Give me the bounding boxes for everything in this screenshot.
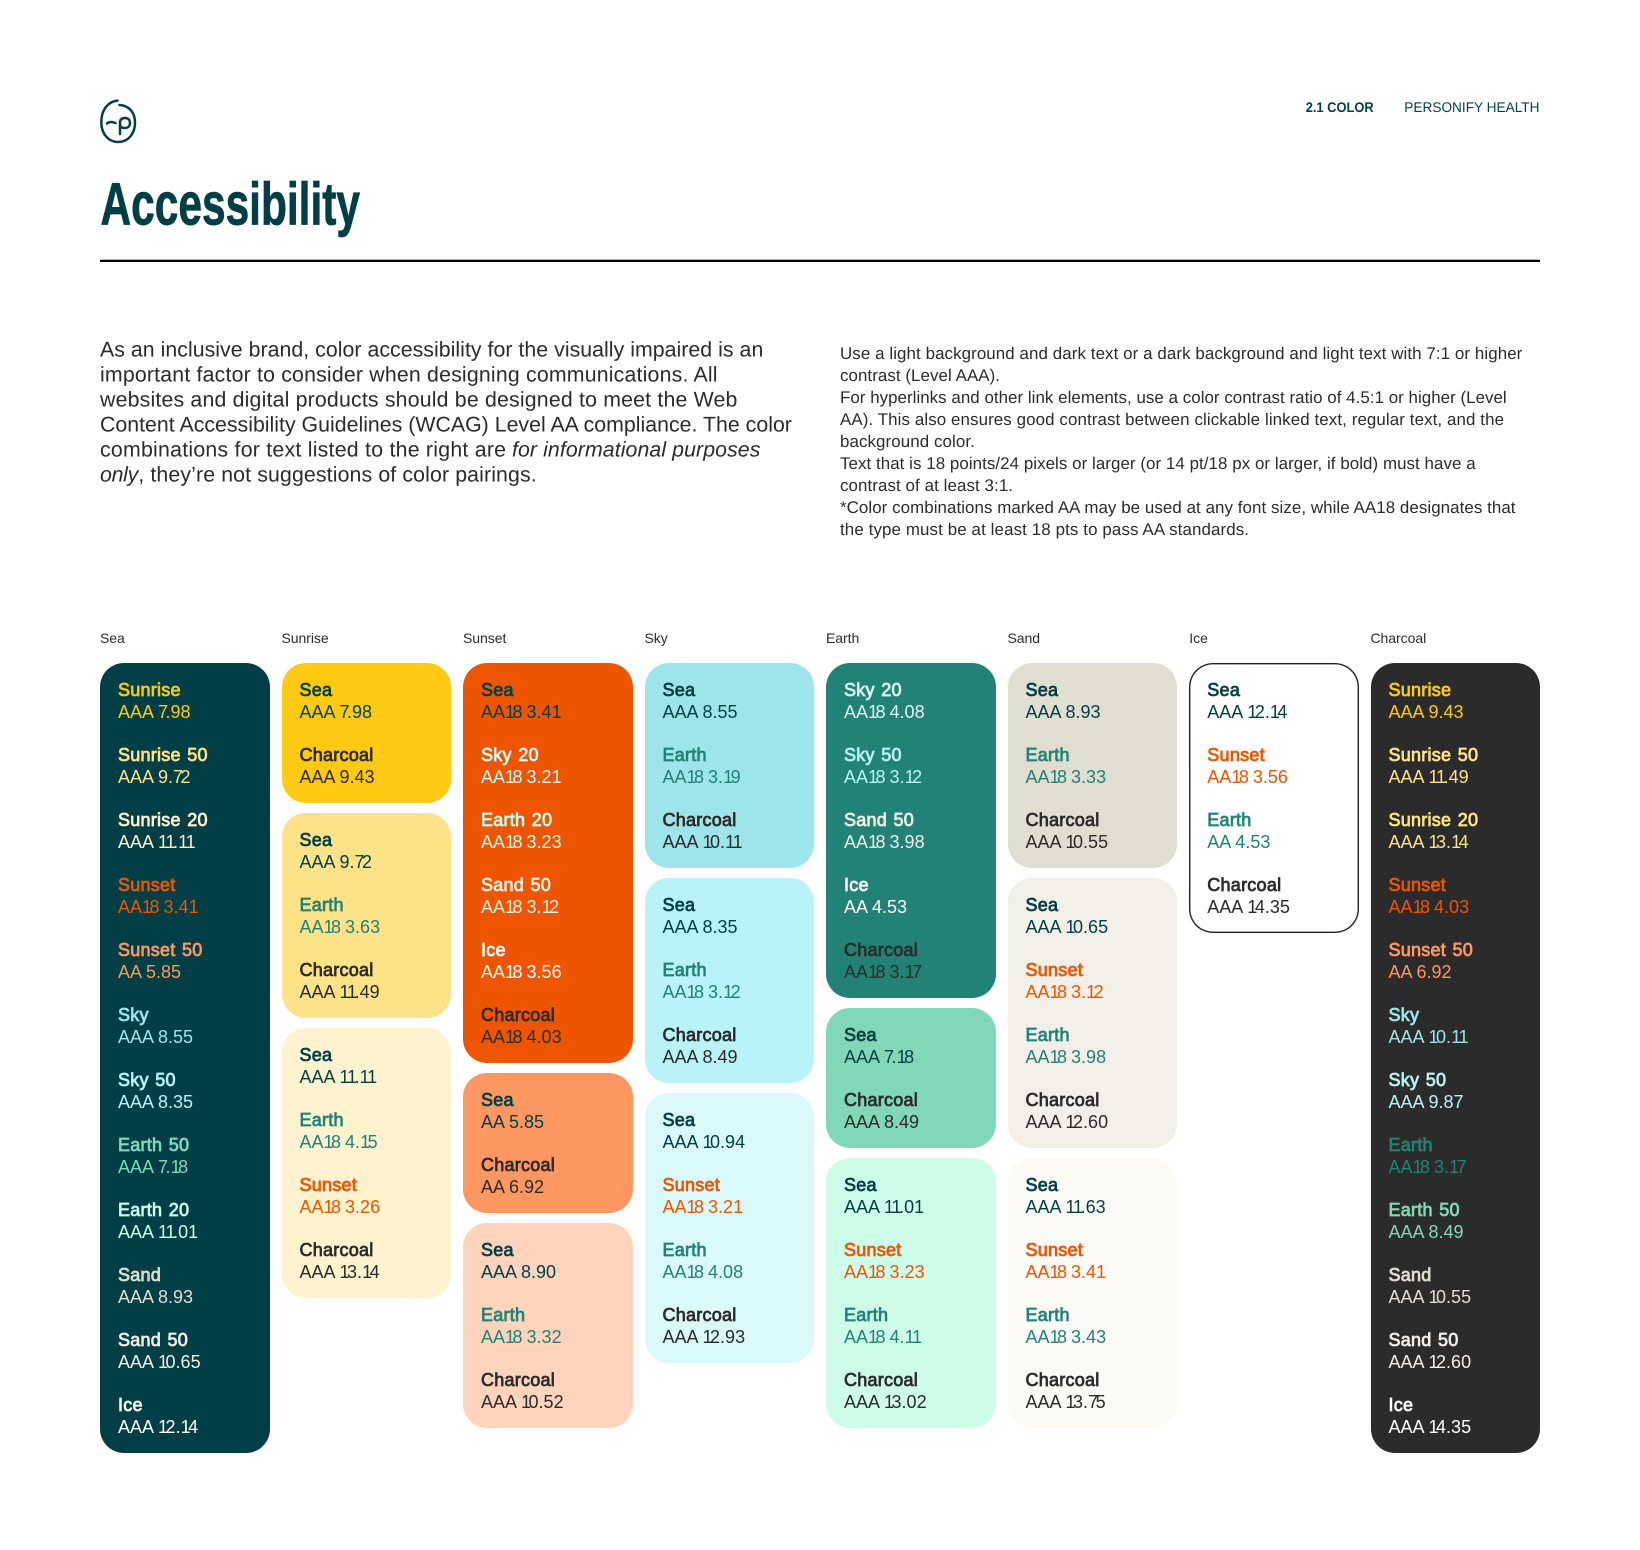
pair: Earth 20: Earth 20 xyxy=(118,1200,189,1220)
column label: Earth: Earth xyxy=(826,630,859,646)
pair: Sky 50: AA18 3.12 xyxy=(844,767,922,787)
pair: Sky 20 xyxy=(844,679,978,723)
pair: Earth xyxy=(844,1304,978,1348)
pair: Charcoal xyxy=(844,1089,978,1133)
pair: Sea xyxy=(662,1109,796,1153)
pair: Sunrise: Sunrise xyxy=(118,680,181,700)
pair: Sea: AAA 9.72 xyxy=(300,852,372,872)
pair: Sea xyxy=(844,1174,978,1218)
pair: Sand 50 xyxy=(1388,1329,1522,1373)
pair: Earth: AA18 4.08 xyxy=(662,1262,743,1282)
card: Sky 50 background xyxy=(644,878,814,1083)
pair: Earth: AA18 3.33 xyxy=(1026,767,1106,787)
pair: Sand: Sand xyxy=(118,1265,161,1285)
pair: Sea: Sea xyxy=(1207,680,1240,700)
pair: Sea xyxy=(662,680,738,722)
pair: Earth 20 xyxy=(118,1200,198,1242)
pair: Sunrise 20 xyxy=(1388,809,1522,853)
pair: Earth xyxy=(1026,1304,1159,1348)
pair: Sea xyxy=(481,1240,556,1282)
pair: Sunset: Sunset xyxy=(1026,1240,1083,1260)
pair: Sky 20: AA18 4.08 xyxy=(844,702,925,722)
pair: Sand 50: Sand 50 xyxy=(118,1330,188,1350)
pair: Ice xyxy=(1388,1394,1522,1438)
pair: Charcoal: Charcoal xyxy=(1026,1370,1100,1390)
pair: Earth: Earth xyxy=(300,1110,344,1130)
pair: Earth: AA 4.53 xyxy=(1207,832,1270,852)
pair: Charcoal: AA18 4.03 xyxy=(481,1027,562,1047)
column: Sky xyxy=(644,630,814,1363)
pair: Sand 50 xyxy=(118,1330,201,1372)
pair: Sky xyxy=(118,1005,193,1047)
intro paragraph xyxy=(99,338,792,487)
column label: Ice: Ice xyxy=(1189,630,1208,646)
pair: Charcoal: Charcoal xyxy=(1207,875,1281,895)
pair: Sunrise: AAA 7.98 xyxy=(118,702,191,722)
pair: Charcoal: AA18 3.17 xyxy=(844,962,920,982)
pair: Earth xyxy=(662,1239,796,1283)
pair: Sand 50 xyxy=(844,809,978,853)
intro paragraph: only xyxy=(100,463,140,487)
column label: Charcoal: Charcoal xyxy=(1370,630,1426,646)
section label: 2.1 COLOR xyxy=(1306,99,1374,115)
pair: Sand: AAA 10.55 xyxy=(1388,1287,1471,1307)
pair: Sand 50: Sand 50 xyxy=(481,875,551,895)
pair: Charcoal: AAA 11.49 xyxy=(300,982,380,1002)
pair: Charcoal: AAA 14.35 xyxy=(1207,897,1290,917)
pair: Sunset: AA18 3.41 xyxy=(118,897,196,917)
card: Sand 20 background xyxy=(1008,1158,1177,1428)
pair: Sky xyxy=(1388,1004,1522,1048)
card: Sky 20 background xyxy=(644,1093,814,1363)
guidelines paragraph: contrast (Level AAA). xyxy=(840,366,1000,385)
pair: Charcoal: Charcoal xyxy=(481,1370,555,1390)
pair: Sunrise 50: Sunrise 50 xyxy=(118,745,208,765)
pair: Earth xyxy=(1388,1134,1522,1178)
pair: Charcoal xyxy=(662,1304,796,1348)
guidelines paragraph: contrast of at least 3:1. xyxy=(840,476,1013,495)
pair: Sunset: AA18 3.21 xyxy=(662,1197,741,1217)
guidelines paragraph: *Color combinations marked AA may be used at any font size, while AA18 designates that xyxy=(840,498,1516,517)
pair: Sunset: AA18 4.03 xyxy=(1388,897,1469,917)
pair: Sky 20: Sky 20 xyxy=(844,680,902,700)
intro paragraph: Content Accessibility Guidelines (WCAG) Level AA compliance. The color xyxy=(100,413,792,437)
column label: Sand: Sand xyxy=(1008,630,1040,646)
pair: Earth 50: AAA 8.49 xyxy=(1388,1222,1464,1242)
pair: Sunrise 50: AAA 11.49 xyxy=(1388,767,1469,787)
pair: Charcoal xyxy=(300,1240,380,1282)
pair: Sky 50 xyxy=(1388,1069,1522,1113)
pair: Sky 20: Sky 20 xyxy=(481,745,539,765)
pair: Charcoal: Charcoal xyxy=(300,745,374,765)
pair: Sunset xyxy=(300,1175,380,1217)
title: Accessibility xyxy=(100,170,360,238)
pair: Sea: Sea xyxy=(662,895,695,915)
pair: Sky: AAA 10.11 xyxy=(1388,1027,1466,1047)
pair: Earth: Earth xyxy=(662,960,707,980)
pair: Earth xyxy=(662,745,741,787)
pair: Sky 50: Sky 50 xyxy=(1388,1070,1446,1090)
pair: Charcoal: AA 6.92 xyxy=(481,1177,544,1197)
pair: Sea: Sea xyxy=(844,1175,877,1195)
column: Sunrise xyxy=(282,630,451,1298)
pair: Sand xyxy=(118,1265,193,1307)
pair: Sunset xyxy=(1026,959,1159,1003)
pair: Sunset: Sunset xyxy=(844,1240,902,1260)
pair: Sea: AAA 7.18 xyxy=(844,1047,914,1067)
pair: Sea: Sea xyxy=(300,830,332,850)
card: Earth 20 background xyxy=(826,1158,996,1428)
pair: Ice: AAA 14.35 xyxy=(1388,1417,1471,1437)
pair: Sunrise 20: Sunrise 20 xyxy=(1388,810,1478,830)
pair: Sea xyxy=(662,895,738,937)
pair: Earth xyxy=(481,1305,562,1347)
pair: Charcoal: Charcoal xyxy=(844,940,918,960)
intro paragraph: for informational purposes xyxy=(512,438,761,462)
pair: Ice: Ice xyxy=(481,940,506,960)
card: Ice background xyxy=(1189,663,1359,933)
pair: Sunset: AA18 3.41 xyxy=(1026,1262,1104,1282)
guidelines paragraph: Text that is 18 points/24 pixels or larger (or 14 pt/18 px or larger, if bold) must have a xyxy=(840,454,1476,473)
column label: Sunrise: Sunrise xyxy=(282,630,329,646)
pair: Sea: Sea xyxy=(662,1110,695,1130)
pair: Charcoal: AAA 12.93 xyxy=(662,1327,745,1347)
pair: Charcoal xyxy=(1207,874,1341,918)
pair: Sunrise 20 xyxy=(118,810,208,852)
pair: Sunset xyxy=(1207,744,1341,788)
pair: Sea: Sea xyxy=(481,1240,514,1260)
intro paragraph: As an inclusive brand, color accessibility for the visually impaired is an xyxy=(100,338,763,362)
pair: Charcoal: AAA 9.43 xyxy=(300,767,375,787)
pair: Charcoal xyxy=(662,810,742,852)
pair: Sunset: Sunset xyxy=(1207,745,1265,765)
pair: Charcoal xyxy=(481,1370,564,1412)
pair: Charcoal xyxy=(1026,1089,1159,1133)
pair: Sunset 50 xyxy=(118,940,203,982)
pair: Sand: AAA 8.93 xyxy=(118,1287,193,1307)
pair: Earth xyxy=(1026,1024,1159,1068)
pair: Sea xyxy=(481,680,561,722)
pair: Earth: AA18 4.11 xyxy=(844,1327,920,1347)
pair: Charcoal: AAA 10.55 xyxy=(1026,832,1108,852)
pair: Charcoal xyxy=(1026,809,1159,853)
pair: Earth: AA18 3.43 xyxy=(1026,1327,1106,1347)
pair: Charcoal: Charcoal xyxy=(662,1305,737,1325)
pair: Ice: AA18 3.56 xyxy=(481,962,562,982)
pair: Earth 20: Earth 20 xyxy=(481,810,552,830)
column: Earth xyxy=(826,630,996,1438)
pair: Sunset: AA18 3.12 xyxy=(1026,982,1104,1002)
card: Sand background xyxy=(1008,663,1177,868)
column label: Sea: Sea xyxy=(100,630,125,646)
guidelines paragraph: Use a light background and dark text or a dark background and light text with 7:1 or higher xyxy=(840,344,1523,363)
pair: Sunrise 20: Sunrise 20 xyxy=(118,810,208,830)
pair: Ice: AA 4.53 xyxy=(844,897,907,917)
pair: Sunset xyxy=(1026,1239,1159,1283)
pair: Earth: Earth xyxy=(662,1240,707,1260)
pair: Sunrise 20: AAA 13.14 xyxy=(1388,832,1469,852)
pair: Charcoal xyxy=(481,1155,555,1197)
pair: Sea: AAA 11.01 xyxy=(844,1197,922,1217)
pair: Earth: Earth xyxy=(481,1305,525,1325)
pair: Sunset xyxy=(1388,874,1522,918)
card: Sunrise 50 background xyxy=(282,813,451,1018)
card: Sky background xyxy=(644,663,814,868)
pair: Sunset 50 xyxy=(1388,939,1522,983)
pair: Sunset: Sunset xyxy=(118,875,176,895)
pair: Earth: Earth xyxy=(1026,1305,1070,1325)
pair: Earth 50 xyxy=(118,1135,189,1177)
pair: Sea: Sea xyxy=(481,1090,514,1110)
intro paragraph: , they’re not suggestions of color pairings. xyxy=(138,463,537,487)
pair: Charcoal: Charcoal xyxy=(1026,1090,1100,1110)
pair: Earth: Earth xyxy=(1026,745,1070,765)
pair: Sky 20: AA18 3.21 xyxy=(481,767,559,787)
pair: Sunrise xyxy=(1388,679,1522,723)
section label xyxy=(1306,99,1540,115)
pair: Sunset 50: Sunset 50 xyxy=(118,940,203,960)
pair: Sea xyxy=(300,680,372,722)
card: Sunset 20 background xyxy=(463,1223,632,1428)
pair: Charcoal: AAA 10.52 xyxy=(481,1392,564,1412)
pair: Sunset xyxy=(662,1174,796,1218)
pair: Charcoal: Charcoal xyxy=(300,1240,374,1260)
guidelines paragraph: the type must be at least 18 pts to pass AA standards. xyxy=(840,520,1249,539)
pair: Charcoal: AAA 8.49 xyxy=(844,1112,919,1132)
pair: Charcoal: Charcoal xyxy=(481,1155,555,1175)
pair: Charcoal: AAA 12.60 xyxy=(1026,1112,1108,1132)
pair: Ice: Ice xyxy=(844,875,869,895)
pair: Sunset: Sunset xyxy=(1026,960,1083,980)
pair: Earth: Earth xyxy=(1388,1135,1433,1155)
pair: Sand 50: AAA 12.60 xyxy=(1388,1352,1471,1372)
pair: Charcoal: AAA 8.49 xyxy=(662,1047,738,1067)
pair: Sand xyxy=(1388,1264,1522,1308)
pair: Sea: Sea xyxy=(300,1045,332,1065)
pair: Sea xyxy=(844,1024,978,1068)
guidelines paragraph: AA). This also ensures good contrast between clickable linked text, regular text, and the xyxy=(840,410,1504,429)
pair: Sky 50: AAA 9.87 xyxy=(1388,1092,1461,1112)
pair: Charcoal: Charcoal xyxy=(1026,810,1100,830)
pair: Earth xyxy=(1026,744,1159,788)
pair: Sand 50: Sand 50 xyxy=(844,810,914,830)
pair: Sea: AAA 8.35 xyxy=(662,917,738,937)
pair: Sea xyxy=(300,1045,376,1087)
pair: Sunrise: Sunrise xyxy=(1388,680,1451,700)
pair: Sand 50: AA18 3.12 xyxy=(481,897,559,917)
pair: Earth: AA18 3.32 xyxy=(481,1327,562,1347)
pair: Charcoal: Charcoal xyxy=(662,1025,737,1045)
pair: Sea xyxy=(1026,679,1159,723)
pair: Sunset: AA18 3.26 xyxy=(300,1197,380,1217)
pair: Earth: AA18 3.12 xyxy=(662,982,741,1002)
pair: Sea: AA 5.85 xyxy=(481,1112,544,1132)
pair: Sea xyxy=(300,830,372,872)
pair: Earth xyxy=(300,895,380,937)
pair: Sea: AAA 10.94 xyxy=(662,1132,745,1152)
card: Earth 50 background xyxy=(826,1008,996,1148)
pair: Earth: Earth xyxy=(1207,810,1252,830)
pair: Sky 50: Sky 50 xyxy=(118,1070,176,1090)
pair: Sky 50: Sky 50 xyxy=(844,745,902,765)
pair: Earth: Earth xyxy=(844,1305,888,1325)
pair: Charcoal: Charcoal xyxy=(844,1370,918,1390)
pair: Earth: Earth xyxy=(1026,1025,1070,1045)
pair: Charcoal xyxy=(1026,1369,1159,1413)
column: Sunset xyxy=(463,630,633,1428)
pair: Sea: AAA 7.98 xyxy=(300,702,372,722)
card: Sunset background xyxy=(463,663,632,1063)
column: Sand xyxy=(1008,630,1177,1438)
pair: Sunrise 50 xyxy=(118,745,208,787)
pair: Sunset: AA18 3.23 xyxy=(844,1262,925,1282)
pair: Charcoal xyxy=(300,960,380,1002)
pair: Sunset 50: AA 6.92 xyxy=(1388,962,1452,982)
pair: Charcoal xyxy=(481,1005,562,1047)
pair: Sand 50: Sand 50 xyxy=(1388,1330,1459,1350)
pair: Earth: AA18 3.98 xyxy=(1026,1047,1106,1067)
pair: Earth: AA18 3.17 xyxy=(1388,1157,1464,1177)
pair: Earth xyxy=(300,1110,378,1152)
pair: Charcoal: AAA 13.02 xyxy=(844,1392,927,1412)
pair: Sky 20 xyxy=(481,745,561,787)
pair: Earth xyxy=(1207,809,1341,853)
pair: Ice: AAA 12.14 xyxy=(118,1417,198,1437)
pair: Ice xyxy=(118,1395,198,1437)
pair: Sea: Sea xyxy=(481,680,514,700)
pair: Sky 50: AAA 8.35 xyxy=(118,1092,193,1112)
pair: Sky: Sky xyxy=(1388,1005,1419,1025)
pair: Earth: AA18 4.15 xyxy=(300,1132,378,1152)
pair: Sea: AAA 12.14 xyxy=(1207,702,1287,722)
card: Sunrise 20 background xyxy=(282,1028,451,1298)
pair: Sea: AAA 8.90 xyxy=(481,1262,556,1282)
pair: Sand 50: AAA 10.65 xyxy=(118,1352,201,1372)
pair: Sunset: Sunset xyxy=(300,1175,357,1195)
pair: Charcoal: Charcoal xyxy=(481,1005,555,1025)
pair: Charcoal: AAA 13.14 xyxy=(300,1262,380,1282)
pair: Sea: Sea xyxy=(300,680,332,700)
pair: Sunrise: AAA 9.43 xyxy=(1388,702,1464,722)
column: Charcoal xyxy=(1370,630,1540,1463)
pair: Ice: Ice xyxy=(118,1395,143,1415)
card: Charcoal background xyxy=(1370,663,1540,1453)
pair: Sea: Sea xyxy=(662,680,695,700)
pair: Earth: Earth xyxy=(662,745,707,765)
intro paragraph: important factor to consider when designing communications. All xyxy=(100,363,718,387)
pair: Sea: Sea xyxy=(1026,895,1058,915)
card: Sunset 50 background xyxy=(463,1073,632,1213)
pair: Sea: Sea xyxy=(1026,1175,1058,1195)
pair: Earth 50: Earth 50 xyxy=(118,1135,189,1155)
pair: Sea: AAA 8.93 xyxy=(1026,702,1101,722)
card: Sunrise background xyxy=(282,663,451,803)
pair: Sky 50 xyxy=(844,744,978,788)
pair: Sea: Sea xyxy=(844,1025,877,1045)
pair: Earth: Earth xyxy=(300,895,344,915)
section label: PERSONIFY HEALTH xyxy=(1404,99,1540,115)
pair: Earth 20: AA18 3.23 xyxy=(481,832,562,852)
pair: Sea xyxy=(481,1090,544,1132)
pair: Sunset 50: AA 5.85 xyxy=(118,962,181,982)
pair: Sand 50: AA18 3.98 xyxy=(844,832,925,852)
pair: Earth 50: AAA 7.18 xyxy=(118,1157,188,1177)
pair: Charcoal xyxy=(844,1369,978,1413)
pair: Sea xyxy=(1207,679,1341,723)
pair: Charcoal: Charcoal xyxy=(662,810,737,830)
pair: Sunset: Sunset xyxy=(1388,875,1446,895)
pair: Sea: AAA 11.63 xyxy=(1026,1197,1106,1217)
pair: Earth: AA18 3.19 xyxy=(662,767,741,787)
pair: Sunset: Sunset xyxy=(662,1175,720,1195)
pair: Sunrise 50: AAA 9.72 xyxy=(118,767,191,787)
pair: Sea: AA18 3.41 xyxy=(481,702,559,722)
pair: Sand: Sand xyxy=(1388,1265,1432,1285)
pair: Earth xyxy=(662,959,796,1003)
pair: Sunset: AA18 3.56 xyxy=(1207,767,1288,787)
column: Ice xyxy=(1189,630,1359,943)
pair: Charcoal: AAA 10.11 xyxy=(662,832,740,852)
pair: Sand 50 xyxy=(481,875,559,917)
pair: Sunrise 50: Sunrise 50 xyxy=(1388,745,1478,765)
pair: Charcoal: Charcoal xyxy=(844,1090,918,1110)
pair: Earth 20: AAA 11.01 xyxy=(118,1222,196,1242)
pair: Ice xyxy=(844,874,978,918)
guidelines paragraph: For hyperlinks and other link elements, use a color contrast ratio of 4.5:1 or higher (Level xyxy=(840,388,1507,407)
pair: Charcoal xyxy=(300,745,375,787)
pair: Charcoal xyxy=(662,1024,796,1068)
pair: Sunrise 20: AAA 11.11 xyxy=(118,832,193,852)
pair: Sea: AAA 8.55 xyxy=(662,702,738,722)
pair: Sea xyxy=(1026,894,1159,938)
pair: Charcoal: Charcoal xyxy=(300,960,374,980)
pair: Charcoal xyxy=(844,939,978,983)
intro paragraph: combinations for text listed to the right are xyxy=(100,438,506,462)
pair: Sunset xyxy=(118,875,198,917)
pair: Ice xyxy=(481,940,562,982)
pair: Earth 20 xyxy=(481,810,562,852)
pair: Sea: AAA 11.11 xyxy=(300,1067,375,1087)
pair: Sea: AAA 10.65 xyxy=(1026,917,1108,937)
card: Earth background xyxy=(826,663,996,998)
card: Sea background xyxy=(100,663,270,1453)
pair: Sky: AAA 8.55 xyxy=(118,1027,193,1047)
pair: Sunset 50: Sunset 50 xyxy=(1388,940,1473,960)
column label: Sky: Sky xyxy=(644,630,668,646)
card: Sand 50 background xyxy=(1008,878,1177,1148)
pair: Sunset xyxy=(844,1239,978,1283)
pair: Earth 50: Earth 50 xyxy=(1388,1200,1460,1220)
intro paragraph: websites and digital products should be designed to meet the Web xyxy=(99,388,737,412)
pair: Sunrise 50 xyxy=(1388,744,1522,788)
pair: Sea xyxy=(1026,1174,1159,1218)
column: Sea xyxy=(100,630,270,1453)
pair: Sky 50 xyxy=(118,1070,193,1112)
column label: Sunset: Sunset xyxy=(463,630,506,646)
guidelines paragraph xyxy=(840,344,1523,539)
pair: Ice: Ice xyxy=(1388,1395,1413,1415)
pair: Earth 50 xyxy=(1388,1199,1522,1243)
pair: Sky: Sky xyxy=(118,1005,149,1025)
pair: Sea: Sea xyxy=(1026,680,1058,700)
pair: Earth: AA18 3.63 xyxy=(300,917,380,937)
guidelines paragraph: background color. xyxy=(840,432,975,451)
pair: Sunrise xyxy=(118,680,191,722)
logo xyxy=(101,101,135,142)
pair: Charcoal: AAA 13.75 xyxy=(1026,1392,1106,1412)
